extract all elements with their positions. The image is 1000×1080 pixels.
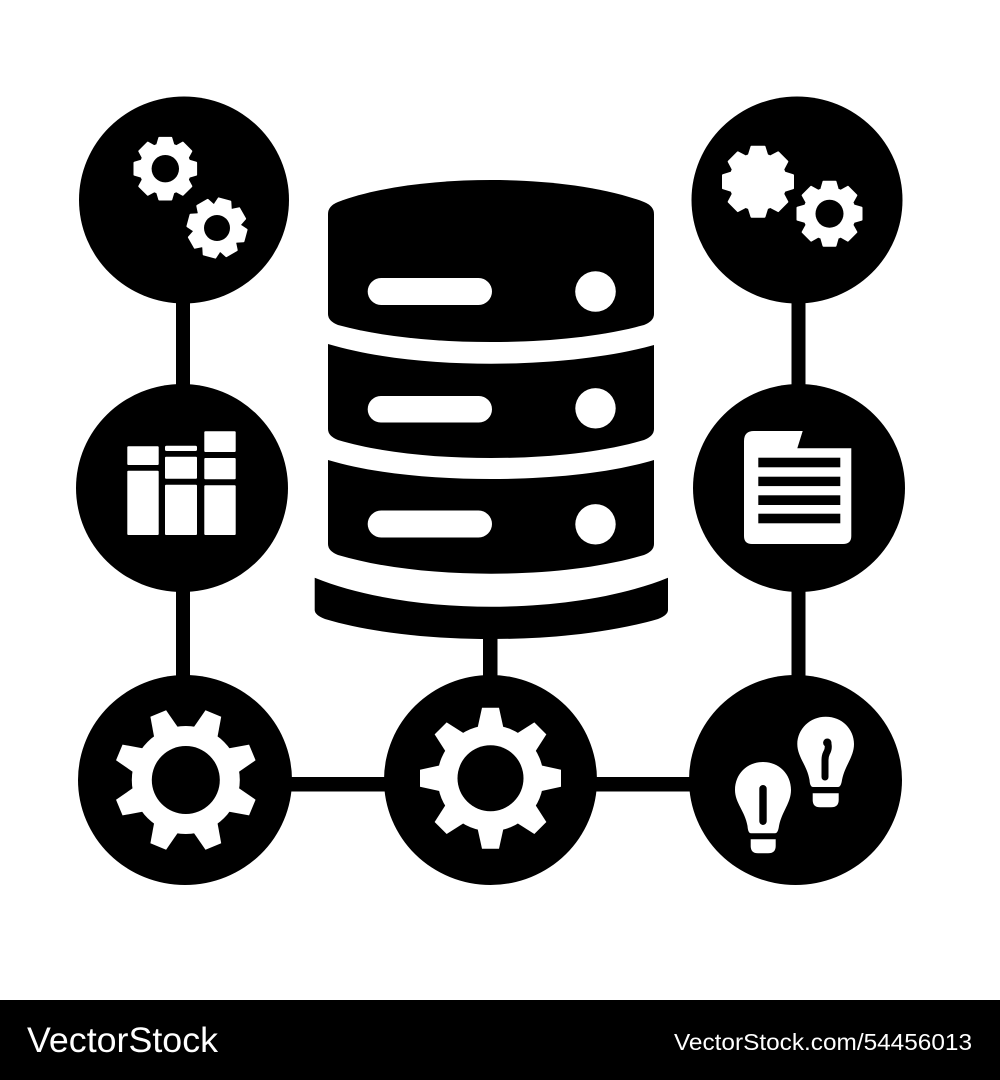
footer logo text: VectorStock [27, 1021, 219, 1060]
node: middle-right document [693, 384, 905, 592]
connector: top-right to middle-right [792, 295, 806, 390]
connector: top-left to middle-left [176, 295, 190, 390]
connector: bottom-center to bottom-right [590, 777, 695, 792]
connector: database to bottom-center [483, 632, 498, 680]
icon: large gear [420, 708, 561, 849]
database segment 2 [328, 344, 654, 458]
icon: lower bulb [735, 762, 791, 853]
icon: large gear [92, 686, 280, 874]
node: bottom-right light bulbs [689, 675, 902, 885]
icon: gear small upper [134, 138, 196, 200]
footer image id text: VectorStock.com/54456013 [674, 1029, 972, 1055]
node: middle-left bar blocks [76, 384, 288, 592]
footer bar [0, 1000, 1000, 1080]
node: bottom-center gear [384, 675, 597, 885]
node: top-left gears [79, 96, 289, 304]
icon: ring gear [798, 182, 862, 246]
database stack [315, 180, 668, 639]
connector: middle-left to bottom-left [176, 585, 190, 680]
icon: upper bulb [797, 717, 854, 807]
icon: gear small lower [181, 192, 253, 264]
connector: middle-right to bottom-right [792, 585, 806, 680]
connector: bottom-left to bottom-center [285, 777, 390, 792]
icon: stacked bars [127, 431, 236, 535]
icon: document [744, 431, 851, 544]
node: top-right gears [692, 96, 902, 304]
database segment 3 [328, 460, 654, 574]
node: bottom-left gear [78, 675, 292, 885]
database base plate [315, 578, 668, 639]
database segment 1 [328, 180, 654, 342]
icon: solid gear [723, 147, 793, 217]
